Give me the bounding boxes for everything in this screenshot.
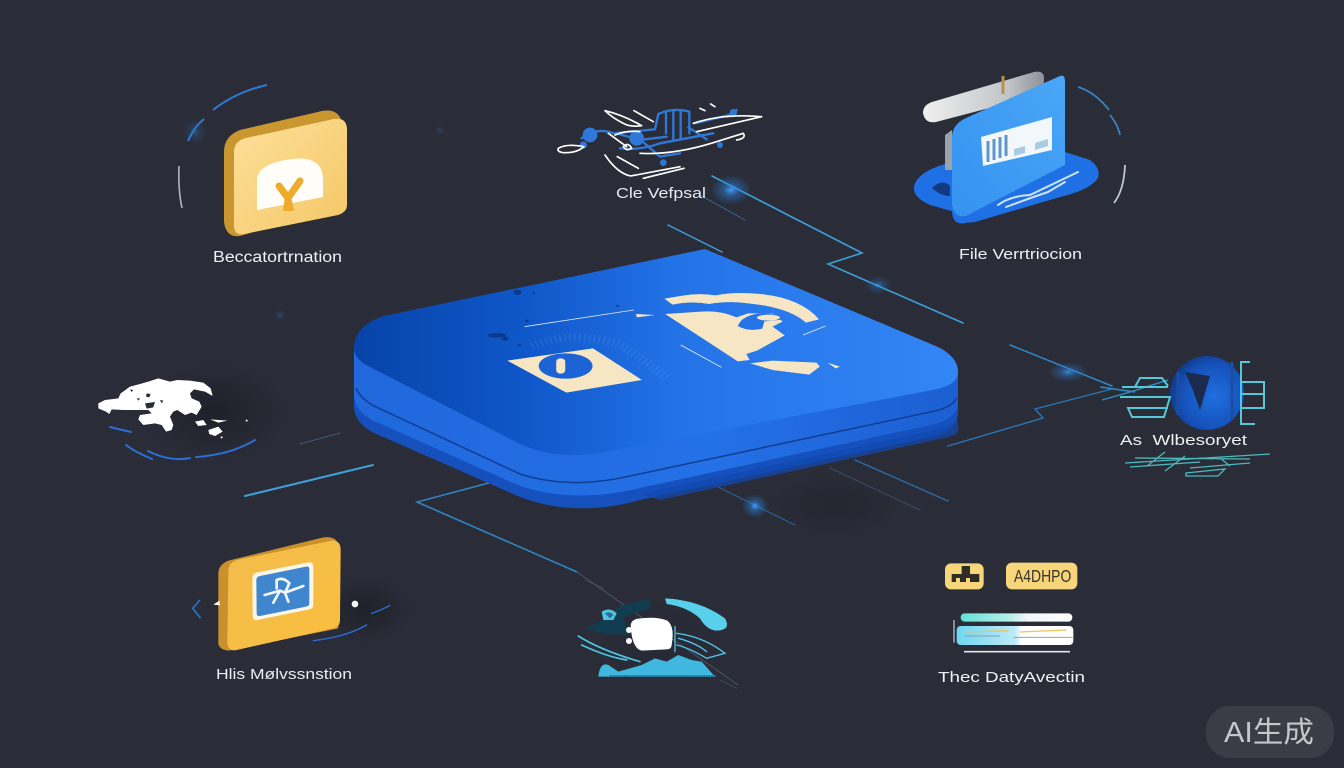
picture frame <box>252 562 313 620</box>
orbit arcs <box>188 85 267 141</box>
platform top face <box>354 249 958 455</box>
platform middle layer <box>354 345 958 496</box>
label: top-center: Cle Vefpsal <box>616 186 706 202</box>
faint sunburst <box>532 337 666 378</box>
folder face <box>952 76 1065 218</box>
icon: blue orb with cyan brackets <box>1100 356 1264 430</box>
dark specks <box>488 290 619 346</box>
folder lower shade <box>952 165 1065 223</box>
platform seam lines <box>356 388 957 483</box>
icon: data badges and bars <box>945 563 1077 652</box>
watermark badge: AI生成 <box>1224 716 1314 749</box>
badge left <box>945 563 984 589</box>
connector lines <box>245 176 1112 685</box>
grey tab bar <box>923 72 1044 122</box>
icon: blue circuit drone <box>558 104 762 178</box>
folder base <box>914 152 1099 223</box>
icon: cyan scribble lines <box>1125 452 1270 476</box>
icon: blue folder with card <box>914 72 1125 223</box>
orbit arcs <box>1078 87 1120 135</box>
data card <box>981 117 1052 166</box>
watermark badge <box>1206 706 1334 758</box>
cloud shield emblem <box>524 293 840 375</box>
label: top-right: File Verrtriocion <box>959 246 1082 263</box>
label: bottom-right: Thec DatyAvectin <box>938 669 1085 686</box>
label: bottom-left: Hlis Mølvssnstion <box>216 666 352 683</box>
soft shadows <box>140 362 905 688</box>
padlock card emblem <box>507 348 642 393</box>
icon: yellow app tile bottom-left <box>193 537 390 651</box>
icon: cyan plug device <box>578 580 737 688</box>
label: right: As Wlbesoryet <box>1120 433 1247 449</box>
icon: yellow app tile top-left <box>179 85 347 236</box>
progress bars <box>954 613 1073 652</box>
icon: world map <box>98 378 255 459</box>
central platform <box>354 249 958 508</box>
glow nodes <box>183 120 1088 518</box>
side accents <box>193 600 201 618</box>
platform lower layer <box>354 395 958 508</box>
label: top-left: Beccatortrnation <box>213 249 342 266</box>
platform emblems <box>488 290 840 393</box>
badge right: A4DHPO <box>1014 566 1071 586</box>
